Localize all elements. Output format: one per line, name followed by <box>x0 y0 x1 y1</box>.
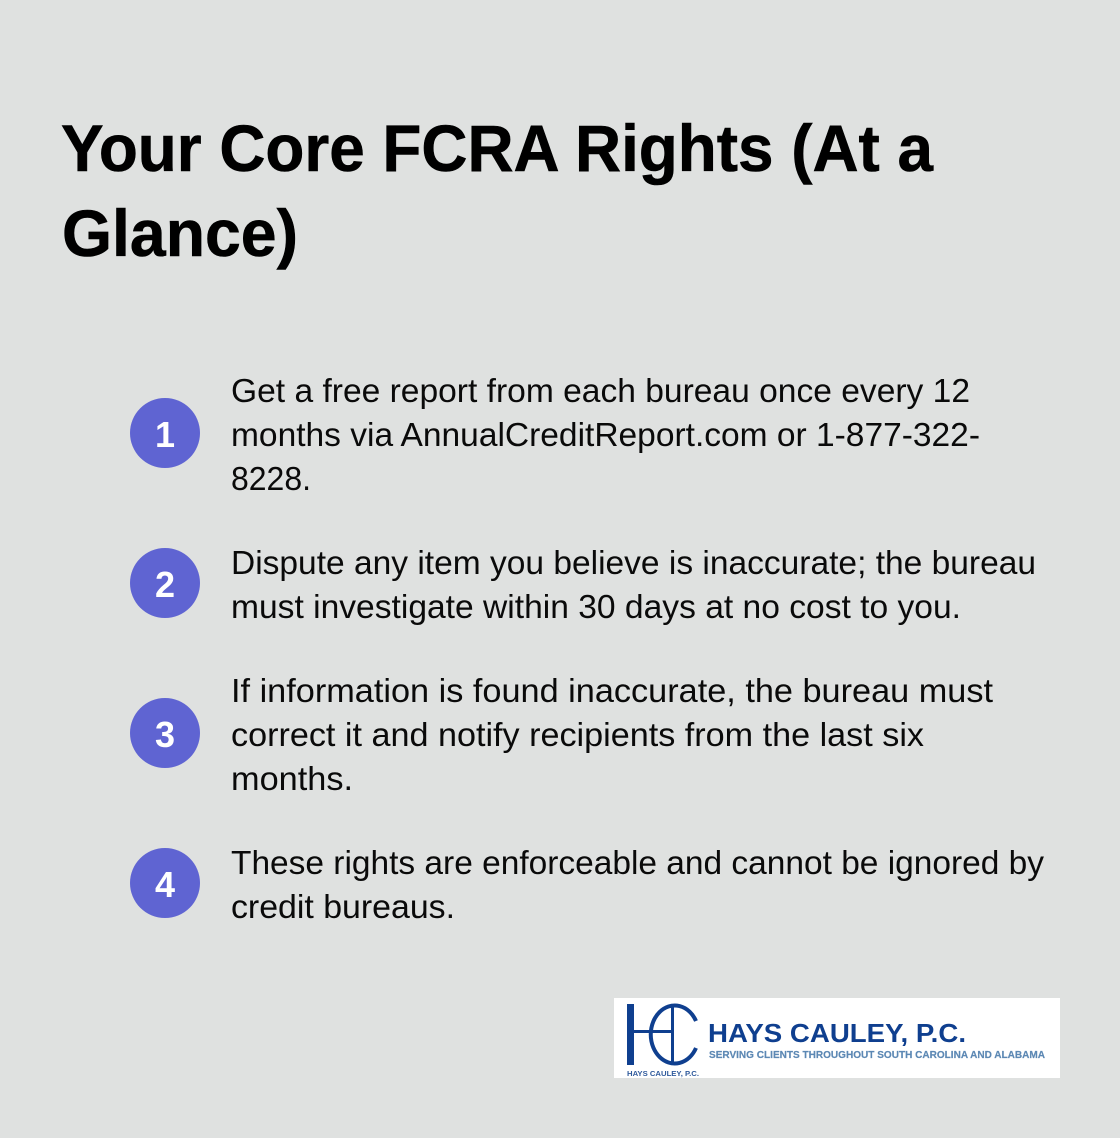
list item 4 <box>130 844 1045 925</box>
logo small name: HAYS CAULEY, P.C. <box>627 1069 699 1078</box>
list item 3 <box>130 672 993 797</box>
number badge 1 <box>130 398 200 468</box>
number badge 2: 2 <box>155 564 175 605</box>
logo: Hays Cauley, P.C. <box>614 998 1060 1078</box>
text: item 3: months. <box>231 760 353 797</box>
logo name: HAYS CAULEY, P.C. <box>708 1018 966 1048</box>
title: Your Core FCRA Rights (At a <box>61 111 934 185</box>
text: item 2: must investigate within 30 days at no cost to you. <box>231 588 961 625</box>
logo tagline: SERVING CLIENTS THROUGHOUT SOUTH CAROLINA AND ALABAMA <box>709 1049 1045 1061</box>
text: item 2 <box>231 544 1036 625</box>
text: item 4: credit bureaus. <box>231 888 455 925</box>
number badge 3 <box>130 698 200 768</box>
text: item 1: 8228. <box>231 460 311 497</box>
icon: HC monogram <box>627 1004 696 1065</box>
text: item 1: months via AnnualCreditReport.com or 1-877-322- <box>231 416 980 453</box>
text: item 3: correct it and notify recipients from the last six <box>231 716 925 753</box>
number badge 4: 4 <box>155 864 175 905</box>
text: item 2: Dispute any item you believe is inaccurate; the bureau <box>231 544 1036 581</box>
title <box>61 111 934 270</box>
text: item 3 <box>231 672 993 797</box>
list item 1 <box>130 372 980 497</box>
number badge 1: 1 <box>155 414 175 455</box>
number badge 2 <box>130 548 200 618</box>
title: Glance) <box>62 196 298 270</box>
number badge 3: 3 <box>155 714 175 755</box>
text: item 4 <box>231 844 1045 925</box>
text: item 4: These rights are enforceable and cannot be ignored by <box>231 844 1045 881</box>
list item 2 <box>130 544 1036 625</box>
number badge 4 <box>130 848 200 918</box>
text: item 1: Get a free report from each bureau once every 12 <box>231 372 970 409</box>
text: item 3: If information is found inaccurate, the bureau must <box>231 672 993 709</box>
text: item 1 <box>231 372 980 497</box>
